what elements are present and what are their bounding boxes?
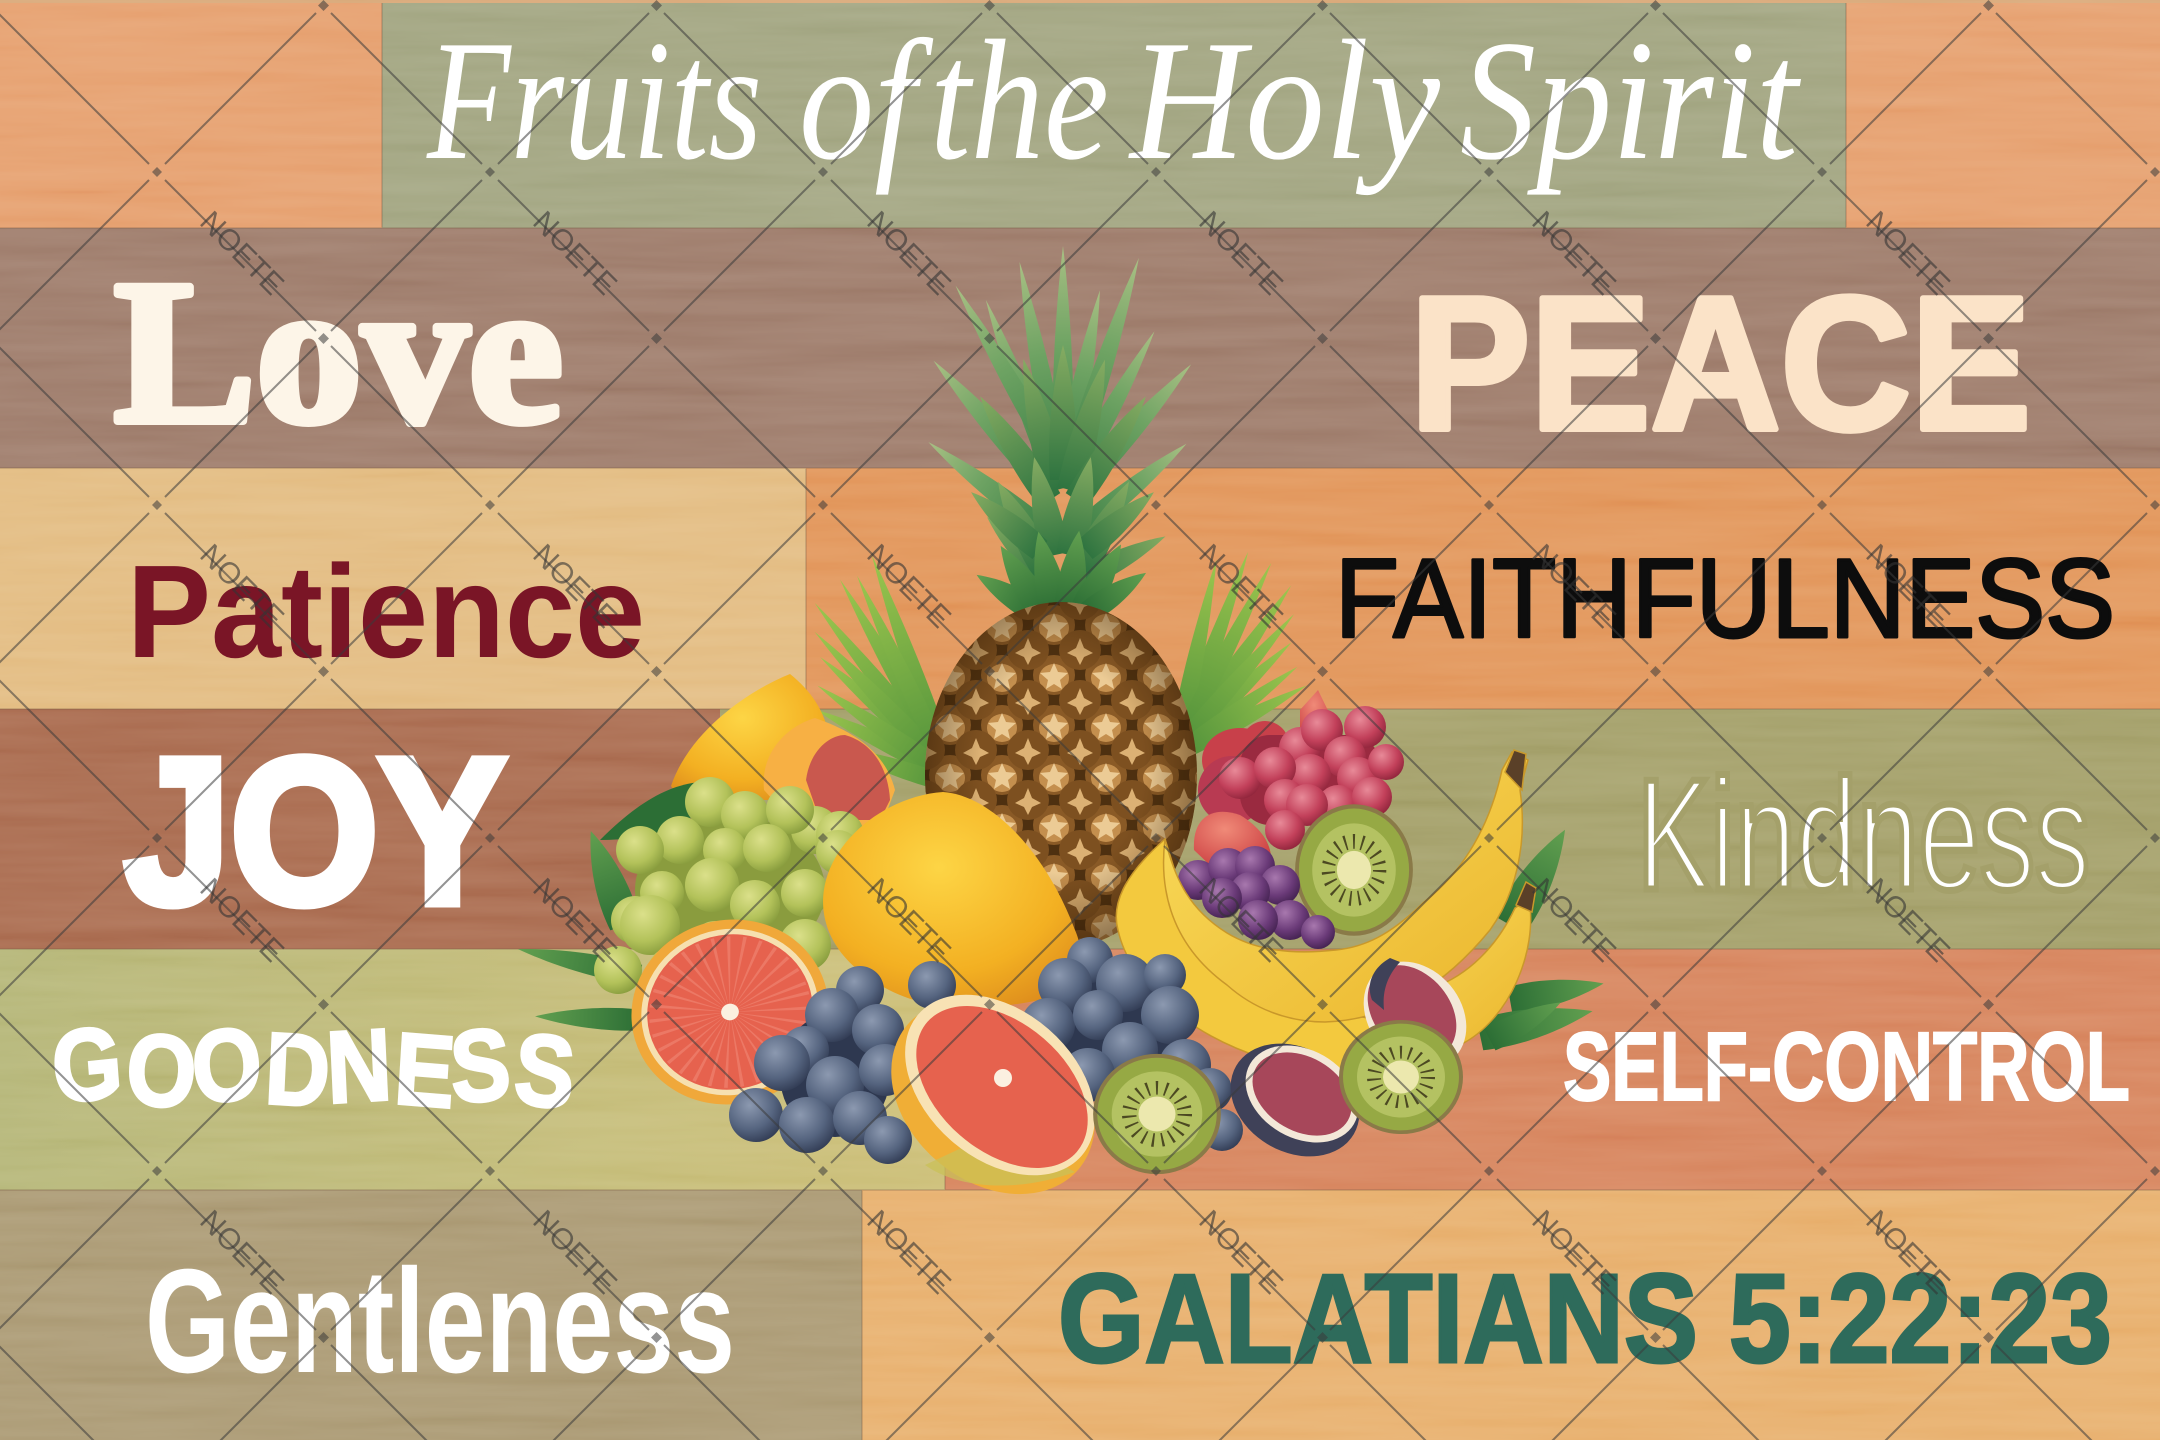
watermark: NOETE labels: NOETE xyxy=(860,205,957,302)
watermark: NOETE labels: NOETE xyxy=(1525,538,1622,635)
watermark: NOETE labels: NOETE xyxy=(1525,872,1622,969)
watermark: NOETE labels: NOETE xyxy=(526,205,623,302)
icon: upper kiwi xyxy=(1295,804,1413,936)
icon: bottom fig xyxy=(1210,1021,1380,1179)
watermark: NOETE labels: NOETE xyxy=(1859,538,1956,635)
panel: joy xyxy=(0,709,720,949)
watermark: NOETE labels: NOETE xyxy=(860,538,957,635)
watermark: NOETE labels: NOETE xyxy=(860,872,957,969)
watermark: NOETE labels: NOETE xyxy=(1859,872,1956,969)
icon: left blue grapes xyxy=(729,961,956,1164)
word: JOY: JOY xyxy=(124,716,506,948)
icon: bananas xyxy=(1116,750,1536,1078)
watermark: NOETE labels: NOETE xyxy=(526,538,623,635)
watermark: NOETE labels: NOETE xyxy=(1192,872,1289,969)
watermark: NOETE labels: NOETE xyxy=(193,205,290,302)
word: PEACE: PEACE xyxy=(1410,258,2031,470)
panel: title band xyxy=(382,3,1846,228)
panel: faithfulness xyxy=(806,468,2160,709)
panel: self-control xyxy=(945,949,2160,1190)
icon: right kiwi xyxy=(1339,1020,1463,1134)
panel: top right orange xyxy=(1846,3,2160,228)
icon: green grapes xyxy=(594,777,864,994)
watermark: NOETE labels xyxy=(193,205,1956,1301)
watermark: NOETE labels: NOETE xyxy=(193,538,290,635)
icon: upper right fig xyxy=(1342,941,1488,1089)
panel: galatians xyxy=(862,1190,2160,1440)
icon: left grapefruit xyxy=(611,898,849,1126)
watermark: NOETE labels: NOETE xyxy=(1192,1204,1289,1301)
icon: palm fronds behind the pineapple xyxy=(808,549,1311,793)
icon: pineapple crown xyxy=(922,246,1199,622)
watermark: NOETE labels: NOETE xyxy=(526,872,623,969)
panel: love and peace band xyxy=(0,228,2160,468)
watermark: NOETE labels: NOETE xyxy=(1859,205,1956,302)
icon: front grapefruit half xyxy=(853,958,1133,1234)
icon: side leaves xyxy=(515,782,1606,1051)
watermark: NOETE labels: NOETE xyxy=(1192,538,1289,635)
title: the xyxy=(930,6,1109,196)
icon: pineapple body xyxy=(925,602,1197,948)
panel: top left orange xyxy=(0,3,382,228)
title: Fruits xyxy=(426,6,762,196)
word: Patience: Patience xyxy=(127,538,645,685)
watermark: NOETE labels: NOETE xyxy=(1525,1204,1622,1301)
word: GOODNESS: GOODNESS xyxy=(47,1005,580,1130)
watermark: NOETE labels: NOETE xyxy=(1192,205,1289,302)
illustration: fruit arrangement xyxy=(515,246,1606,1234)
word: FAITHFULNESS: FAITHFULNESS xyxy=(1335,536,2115,661)
watermark: NOETE labels: NOETE xyxy=(1525,205,1622,302)
icon: large orange xyxy=(823,792,1081,1008)
panel: patience xyxy=(0,468,806,709)
icon: centre blue grapes xyxy=(1021,937,1243,1151)
icon: bottom kiwi xyxy=(1093,1054,1221,1174)
title: Holy xyxy=(1128,6,1441,196)
word: Gentleness: Gentleness xyxy=(145,1239,735,1404)
icon: purple grapes xyxy=(1178,846,1335,949)
panel: kindness xyxy=(720,709,2160,949)
panel: gentleness xyxy=(0,1190,862,1440)
word: Love: Love xyxy=(114,239,563,466)
watermark: NOETE labels: NOETE xyxy=(193,1204,290,1301)
watermark: NOETE labels: NOETE xyxy=(1859,1204,1956,1301)
watermark: NOETE labels: NOETE xyxy=(193,872,290,969)
icon: red grapes and strawberries xyxy=(1194,690,1404,870)
watermark: NOETE labels: NOETE xyxy=(860,1204,957,1301)
title xyxy=(426,6,1802,196)
icon: back citrus wedge and slice xyxy=(671,674,895,830)
title: of xyxy=(799,6,934,196)
title: Spirit xyxy=(1460,6,1802,196)
panel: goodness xyxy=(0,949,945,1190)
watermark: NOETE labels: NOETE xyxy=(526,1204,623,1301)
